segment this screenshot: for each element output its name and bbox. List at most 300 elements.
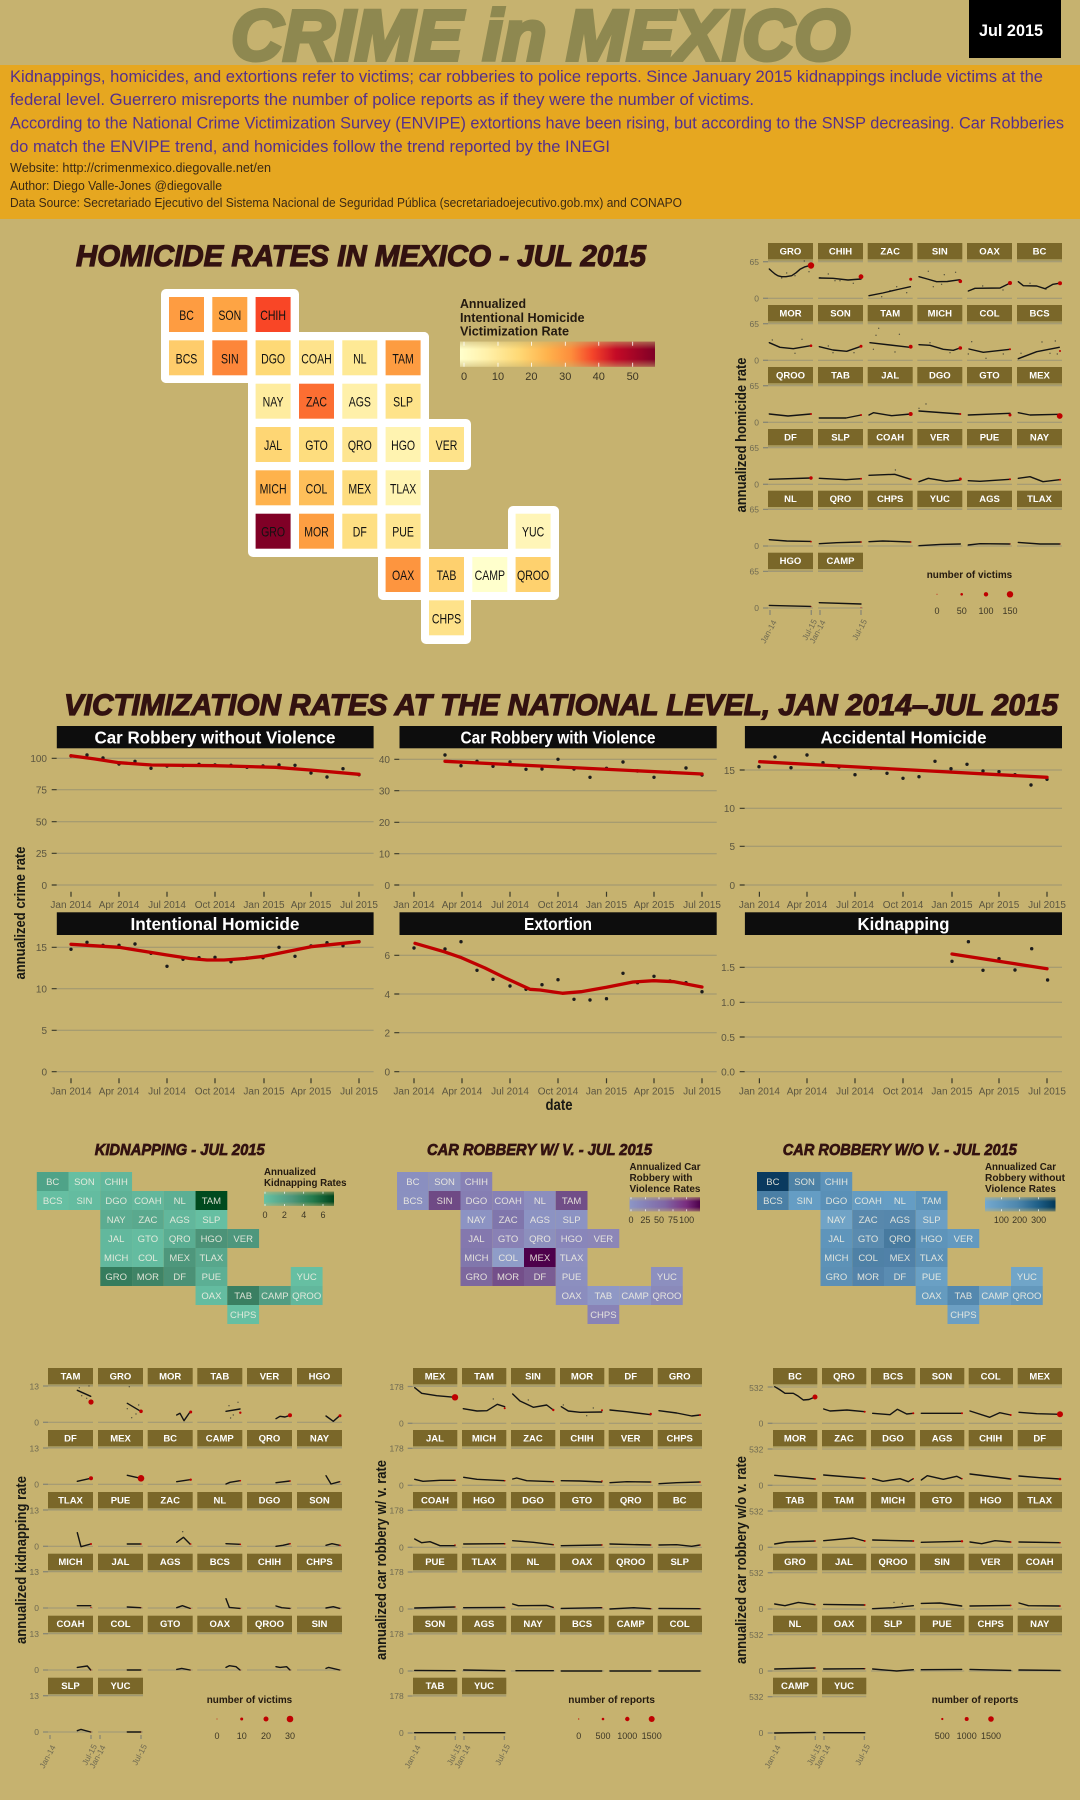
HGO: HGO — [561, 1234, 582, 1245]
OAX: OAX — [572, 1557, 593, 1568]
small multiples: car robbery with violence — [373, 1368, 702, 1770]
SON — [920, 1368, 964, 1423]
y labels — [379, 755, 390, 892]
MOR: MOR — [137, 1272, 159, 1283]
HGO — [386, 427, 421, 462]
AGS — [148, 1554, 193, 1609]
legend: kidnapping rates: 2 — [282, 1210, 287, 1220]
CHPS: CHPS — [977, 1619, 1004, 1630]
TAM: TAM — [922, 1196, 941, 1207]
x labels: Jan 2014 — [50, 900, 92, 911]
CHIH: CHIH — [105, 1177, 128, 1188]
MOR: MOR — [784, 1434, 806, 1444]
AGS: AGS — [349, 394, 371, 410]
HGO — [969, 1492, 1013, 1547]
COAH: COAH — [854, 1196, 882, 1207]
SIN: SIN — [525, 1372, 541, 1382]
CHPS — [868, 491, 913, 546]
BCS: BCS — [43, 1196, 62, 1207]
x axis: Jul-15 — [851, 617, 869, 642]
PUE: PUE — [932, 1619, 952, 1630]
AGS — [342, 384, 377, 419]
CHPS — [297, 1554, 342, 1609]
SIN — [69, 1191, 100, 1210]
legend: number of victims: number of victims — [927, 569, 1012, 581]
DGO — [460, 1191, 492, 1210]
QROO: QROO — [292, 1291, 321, 1302]
NAY: NAY — [263, 394, 284, 410]
x labels: Jan 2014 — [739, 1086, 780, 1098]
y labels: 75 — [36, 786, 47, 796]
COAH: COAH — [57, 1619, 85, 1630]
QRO: QRO — [833, 1372, 855, 1382]
TAB — [429, 557, 464, 592]
SON: SON — [425, 1619, 445, 1630]
PUE — [967, 429, 1012, 484]
TAB: TAB — [426, 1681, 445, 1692]
MICH — [48, 1554, 93, 1608]
legend: number of victims: 50 — [957, 606, 967, 616]
COAH — [48, 1616, 93, 1670]
legend: car robbery with violence rates: Annualized Car — [630, 1162, 701, 1173]
MEX — [1017, 367, 1063, 422]
x labels: Jul 2015 — [340, 1086, 378, 1098]
TLAX: TLAX — [1027, 494, 1053, 505]
BCS: BCS — [210, 1557, 230, 1568]
TAM: TAM — [562, 1196, 581, 1207]
BC: BC — [788, 1372, 802, 1382]
HGO — [196, 1229, 227, 1248]
SON — [818, 305, 863, 360]
legend: number of victims: 0 — [214, 1731, 220, 1741]
VER: VER — [233, 1234, 253, 1245]
data points — [445, 755, 702, 777]
OAX — [196, 1286, 227, 1305]
x labels — [393, 1086, 721, 1098]
MICH: MICH — [881, 1496, 905, 1506]
y axis ticks: 0 — [759, 1666, 764, 1676]
SON — [789, 1172, 820, 1191]
y labels: 40 — [379, 755, 390, 766]
DGO — [256, 340, 291, 375]
VER: VER — [621, 1434, 641, 1444]
y labels: 50 — [36, 818, 47, 828]
COL: COL — [858, 1253, 878, 1264]
COL: COL — [306, 481, 328, 497]
NAY — [1017, 429, 1062, 484]
COL — [132, 1248, 164, 1267]
CHPS — [969, 1616, 1013, 1671]
QRO: QRO — [889, 1234, 911, 1245]
y labels: 6 — [384, 951, 390, 962]
HGO: HGO — [309, 1372, 330, 1382]
TLAX — [1018, 1492, 1062, 1547]
SON: SON — [218, 308, 241, 323]
y labels: 100 — [30, 754, 47, 765]
SON: SON — [74, 1177, 95, 1188]
legend: homicide rate: 0 — [461, 371, 467, 383]
OAX: OAX — [392, 568, 414, 583]
CAMP — [619, 1286, 651, 1305]
x labels — [50, 1086, 378, 1098]
legend: car robbery without violence rates: Violence Rates — [985, 1184, 1056, 1195]
SIN: SIN — [797, 1196, 813, 1207]
CHIH — [818, 243, 863, 298]
HGO: HGO — [201, 1234, 222, 1245]
JAL: JAL — [112, 1557, 130, 1568]
y axis ticks: 0 — [759, 1542, 764, 1552]
BCS: BCS — [572, 1619, 592, 1630]
date badge: Jul 2015 — [979, 21, 1043, 40]
TLAX — [48, 1492, 93, 1547]
TAB: TAB — [786, 1496, 805, 1506]
x labels: Apr 2015 — [979, 900, 1020, 911]
strip title: Car Robbery with Violence — [460, 728, 656, 748]
CHPS — [588, 1305, 619, 1324]
TLAX: TLAX — [1027, 1496, 1053, 1506]
TLAX: TLAX — [200, 1253, 224, 1264]
TAB: TAB — [595, 1291, 612, 1302]
GRO: GRO — [784, 1557, 806, 1568]
trend line — [71, 942, 359, 960]
BCS — [871, 1368, 915, 1423]
TAB — [413, 1678, 457, 1733]
BC — [658, 1492, 702, 1547]
x labels: Jan 2015 — [586, 900, 628, 911]
AGS: AGS — [530, 1215, 550, 1226]
PUE — [916, 1267, 948, 1286]
TAB — [818, 367, 863, 422]
VER — [948, 1229, 979, 1248]
DGO: DGO — [929, 370, 951, 382]
SIN — [429, 1191, 460, 1210]
y axis title: annualized homicide rate — [733, 358, 750, 512]
COAH — [1018, 1554, 1062, 1609]
BC — [1017, 243, 1062, 298]
QROO: QROO — [1012, 1291, 1041, 1302]
YUC: YUC — [522, 524, 544, 540]
y axis ticks: 13 — [30, 1506, 39, 1516]
x labels: Oct 2014 — [195, 900, 236, 911]
x axis: Jul-15 — [445, 1742, 464, 1767]
SLP: SLP — [61, 1681, 80, 1692]
legend: homicide rate — [460, 297, 655, 383]
y axis ticks: 532 — [749, 1568, 764, 1578]
COL — [98, 1616, 143, 1670]
TAB: TAB — [234, 1291, 252, 1302]
x labels: Jan 2015 — [931, 900, 973, 911]
legend: car robbery with violence rates — [628, 1162, 701, 1225]
legend: number of victims: 0 — [934, 606, 940, 616]
BCS: BCS — [403, 1196, 423, 1207]
MICH — [871, 1492, 915, 1547]
TAB: TAB — [831, 370, 850, 382]
PUE — [98, 1492, 143, 1546]
y axis ticks — [30, 1382, 48, 1737]
CHIH: CHIH — [979, 1434, 1002, 1444]
GTO — [132, 1229, 164, 1248]
x labels: Apr 2015 — [979, 1086, 1020, 1098]
JAL — [868, 367, 913, 422]
MEX: MEX — [425, 1372, 446, 1382]
x axis: Jul-15 — [854, 1742, 872, 1767]
MICH: MICH — [260, 481, 287, 497]
QROO: QROO — [776, 370, 805, 382]
x labels: Apr 2014 — [442, 900, 483, 911]
YUC: YUC — [834, 1681, 854, 1692]
DF: DF — [353, 524, 367, 540]
x axis: Jan-14 — [763, 1743, 783, 1770]
HGO — [462, 1492, 506, 1547]
GTO: GTO — [160, 1619, 180, 1630]
y axis ticks: 532 — [749, 1444, 764, 1454]
legend: number of reports: 1500 — [642, 1731, 662, 1741]
PUE — [556, 1267, 588, 1286]
y axis ticks: 65 — [750, 566, 759, 576]
x labels — [739, 900, 1066, 911]
MICH: MICH — [58, 1557, 83, 1568]
SLP — [48, 1678, 93, 1732]
y labels: 2 — [384, 1028, 390, 1040]
tile map: car robbery with violence — [397, 1172, 683, 1324]
NAY: NAY — [827, 1215, 846, 1226]
y labels — [36, 943, 47, 1078]
MOR — [560, 1368, 604, 1423]
CHPS — [429, 600, 464, 635]
DF: DF — [173, 1272, 186, 1283]
QRO: QRO — [259, 1434, 280, 1444]
credits: Author: Diego Valle-Jones @diegovalle — [10, 179, 222, 193]
trend line — [760, 762, 1047, 777]
legend: homicide rate: Annualized — [460, 297, 526, 311]
y labels: 30 — [379, 786, 390, 798]
TAM — [822, 1492, 866, 1547]
x labels: Oct 2014 — [883, 1086, 924, 1098]
legend: number of victims: 20 — [261, 1731, 271, 1741]
TAM: TAM — [834, 1496, 854, 1506]
legend: car robbery without violence rates: 200 — [1012, 1215, 1027, 1225]
x labels: Jul 2014 — [148, 1086, 186, 1098]
BCS: BCS — [883, 1372, 903, 1382]
COL — [967, 305, 1012, 360]
GTO: GTO — [979, 370, 1000, 382]
legend: car robbery with violence rates: 0 — [628, 1215, 634, 1225]
BCS — [757, 1191, 789, 1210]
SIN — [297, 1616, 342, 1670]
CHPS — [658, 1430, 702, 1485]
COL — [492, 1248, 524, 1267]
DGO: DGO — [466, 1196, 487, 1207]
VER: VER — [594, 1234, 613, 1245]
MEX — [884, 1248, 916, 1267]
y axis ticks: 532 — [749, 1506, 764, 1516]
NL — [768, 491, 813, 546]
OAX: OAX — [210, 1619, 231, 1630]
TAM — [916, 1191, 948, 1210]
legend: kidnapping rates: 6 — [320, 1210, 326, 1220]
TAM: TAM — [474, 1372, 494, 1382]
MOR — [299, 514, 334, 549]
SLP: SLP — [923, 1215, 941, 1226]
legend: number of victims: 30 — [285, 1731, 295, 1741]
NL — [164, 1191, 196, 1210]
NL: NL — [789, 1619, 802, 1630]
QRO — [524, 1229, 556, 1248]
SIN: SIN — [221, 351, 239, 367]
y axis ticks: 65 — [750, 443, 759, 453]
x labels: Oct 2014 — [538, 1086, 579, 1098]
y labels: 20 — [379, 818, 390, 829]
legend: car robbery without violence rates — [985, 1162, 1066, 1225]
HGO: HGO — [780, 556, 801, 567]
chart: accidental homicide — [724, 726, 1066, 911]
legend: car robbery without violence rates: 300 — [1031, 1215, 1046, 1225]
SLP: SLP — [563, 1215, 581, 1226]
ZAC: ZAC — [138, 1215, 158, 1226]
ZAC: ZAC — [306, 394, 327, 410]
BC — [773, 1368, 818, 1423]
legend: car robbery without violence rates: Annualized Car — [985, 1162, 1056, 1173]
YUC: YUC — [930, 494, 950, 505]
y axis ticks: 0 — [759, 1418, 764, 1428]
MICH — [462, 1430, 506, 1485]
legend: car robbery with violence rates: Violence Rates — [630, 1184, 701, 1195]
x axis: Jan-14 — [38, 1743, 58, 1770]
GTO: GTO — [305, 438, 328, 453]
SON: SON — [830, 308, 851, 320]
y axis ticks: 178 — [390, 1567, 404, 1577]
DGO — [100, 1191, 132, 1210]
GRO — [256, 514, 291, 549]
y axis ticks: 532 — [749, 1630, 764, 1640]
y labels: 10 — [379, 850, 390, 860]
SON — [297, 1492, 342, 1546]
y labels: 0.0 — [721, 1068, 735, 1078]
DGO: DGO — [105, 1196, 127, 1207]
VER: VER — [981, 1557, 1001, 1568]
SON — [429, 1172, 460, 1191]
QRO: QRO — [348, 438, 372, 453]
BCS — [560, 1616, 604, 1671]
JAL: JAL — [264, 438, 282, 453]
BC — [148, 1430, 193, 1484]
GRO: GRO — [466, 1272, 487, 1283]
DF: DF — [64, 1434, 77, 1444]
data points — [71, 755, 359, 777]
intro panel — [0, 65, 1080, 219]
DF: DF — [624, 1372, 637, 1382]
JAL: JAL — [881, 370, 899, 382]
BCS — [1017, 305, 1062, 360]
MEX — [524, 1248, 556, 1267]
GTO — [299, 427, 334, 462]
NL: NL — [213, 1496, 226, 1506]
JAL — [98, 1554, 143, 1608]
QRO — [884, 1229, 916, 1248]
TAM — [196, 1191, 227, 1210]
ZAC — [148, 1492, 193, 1546]
NAY: NAY — [1030, 1619, 1050, 1630]
x labels: Jul 2015 — [340, 900, 378, 911]
OAX: OAX — [562, 1291, 582, 1302]
QROO — [768, 367, 813, 422]
TAB — [773, 1492, 817, 1547]
COL: COL — [670, 1619, 690, 1630]
OAX: OAX — [201, 1291, 222, 1302]
CAMP — [979, 1286, 1011, 1305]
MEX: MEX — [110, 1434, 131, 1444]
x labels: Apr 2014 — [787, 1086, 828, 1098]
legend: number of victims: 10 — [237, 1731, 247, 1741]
QRO: QRO — [620, 1496, 642, 1506]
NL: NL — [353, 351, 367, 367]
SON — [212, 297, 247, 332]
TLAX: TLAX — [58, 1496, 84, 1506]
y axis ticks: 13 — [30, 1382, 39, 1392]
y axis ticks: 0 — [754, 356, 759, 366]
DF — [884, 1267, 916, 1286]
HGO: HGO — [980, 1496, 1002, 1506]
trend line — [952, 954, 1047, 969]
ZAC — [492, 1210, 524, 1229]
TAB — [197, 1368, 242, 1422]
OAX — [197, 1616, 242, 1670]
y axis ticks: 13 — [30, 1691, 39, 1701]
SLP: SLP — [884, 1619, 903, 1630]
DF — [342, 514, 377, 549]
intro text: do match the ENVIPE trend, and homicides follow the trend reported by the INEGI — [10, 137, 610, 156]
y labels: 15 — [724, 766, 735, 777]
PUE: PUE — [922, 1272, 941, 1283]
MICH: MICH — [472, 1434, 496, 1444]
QROO — [516, 557, 551, 592]
TAB: TAB — [437, 568, 456, 583]
TAB: TAB — [210, 1372, 229, 1382]
x labels: Oct 2014 — [883, 900, 924, 911]
legend: number of reports: number of reports — [932, 1694, 1019, 1706]
ZAC: ZAC — [859, 1215, 878, 1226]
x labels: Apr 2014 — [442, 1086, 483, 1098]
HGO — [768, 553, 813, 608]
QROO: QROO — [255, 1619, 284, 1630]
SON — [69, 1172, 100, 1191]
x labels: Apr 2014 — [99, 1086, 140, 1098]
CHIH — [247, 1554, 292, 1609]
AGS — [920, 1430, 964, 1485]
YUC: YUC — [297, 1272, 317, 1283]
TAM: TAM — [392, 351, 414, 367]
YUC: YUC — [474, 1681, 494, 1692]
MOR — [148, 1368, 193, 1422]
legend: number of reports: 0 — [576, 1731, 581, 1741]
MICH: MICH — [464, 1253, 489, 1264]
ZAC — [511, 1430, 555, 1485]
YUC — [651, 1267, 683, 1286]
NAY — [511, 1616, 555, 1671]
HGO: HGO — [473, 1496, 495, 1506]
BC — [169, 297, 204, 332]
PUE: PUE — [392, 524, 414, 540]
legend: homicide rate: 50 — [627, 371, 639, 383]
GRO: GRO — [669, 1372, 691, 1382]
MOR: MOR — [304, 524, 329, 540]
legend: car robbery without violence rates: 100 — [994, 1215, 1009, 1225]
y axis ticks: 0 — [754, 541, 759, 551]
trend line — [71, 756, 359, 774]
x labels: Jan 2015 — [243, 1086, 285, 1098]
SIN — [212, 340, 247, 375]
GTO — [148, 1616, 193, 1670]
